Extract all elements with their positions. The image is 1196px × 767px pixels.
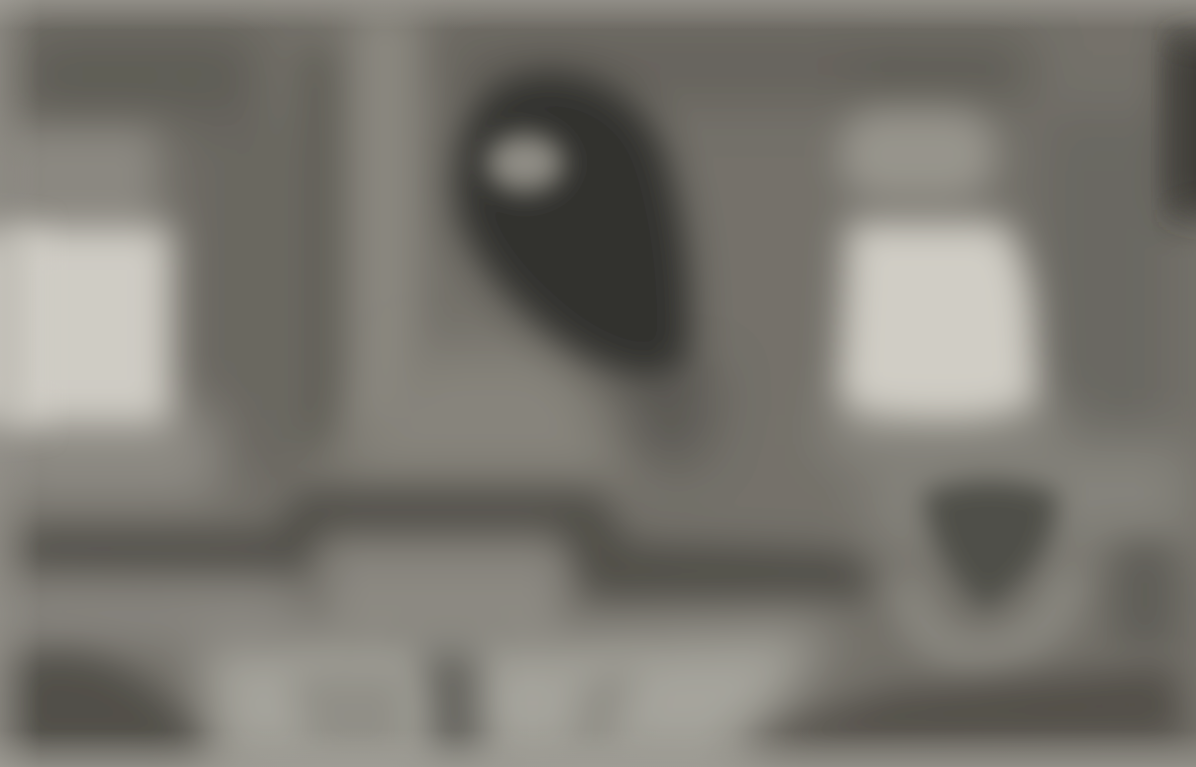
left panel lower glow bbox=[0, 410, 220, 500]
central dark shape bbox=[454, 72, 691, 377]
central dark shape tail bbox=[620, 370, 720, 460]
bottom right dark band bbox=[730, 665, 1185, 745]
bottom center dark stripe bbox=[420, 650, 485, 760]
shield dark shape bbox=[922, 480, 1058, 610]
left light panel bbox=[0, 225, 172, 425]
center lower light block bbox=[330, 552, 560, 632]
horizontal dark band bbox=[20, 490, 870, 600]
bottom mid tone stripes bbox=[290, 660, 640, 760]
right panel glow bbox=[830, 410, 1060, 450]
right top corner dark bbox=[1170, 30, 1196, 220]
vertical light column bbox=[352, 10, 418, 430]
left panel edge fill bbox=[0, 235, 70, 420]
bottom edge light band bbox=[0, 730, 1196, 767]
bottom right lighter area bbox=[870, 440, 1190, 550]
bottom left dark shape bbox=[10, 652, 205, 755]
left edge grey bbox=[0, 0, 40, 767]
left panel upper tone bbox=[10, 130, 155, 220]
top edge light band bbox=[0, 0, 1196, 30]
right panel cap bbox=[840, 110, 995, 200]
right ring arc bbox=[905, 570, 1075, 655]
central light spot bbox=[487, 135, 563, 191]
upper wall shading bbox=[20, 30, 1170, 480]
right small dark block bbox=[1112, 542, 1178, 647]
right corner edge fill bbox=[1150, 40, 1196, 210]
center lower light trapezoid bbox=[320, 350, 640, 480]
vertical dark stripe bbox=[298, 50, 334, 450]
lower light area bbox=[200, 630, 830, 767]
lower left mid tone bbox=[0, 590, 300, 640]
right light panel bbox=[838, 222, 1038, 425]
